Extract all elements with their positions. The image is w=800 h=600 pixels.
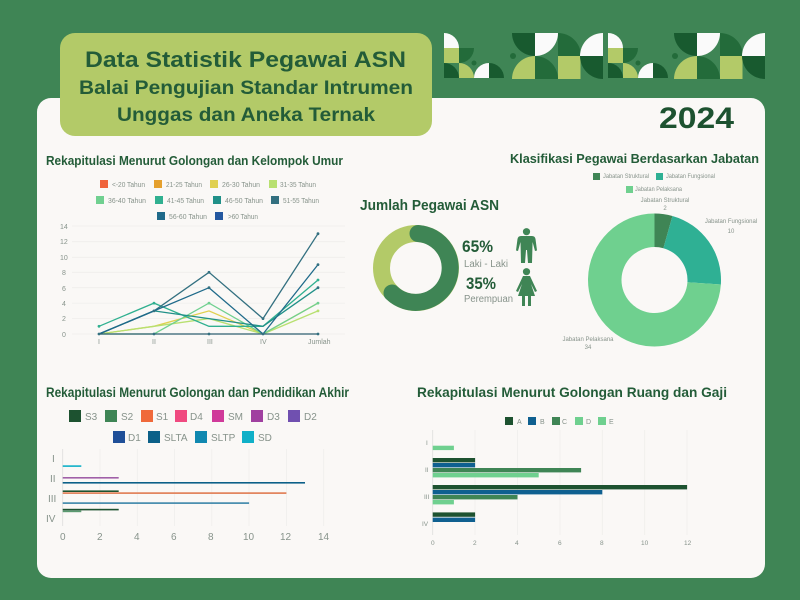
legend: jabatan: Jabatan Struktural — [603, 174, 649, 180]
line chart: age group by rank: I — [98, 339, 100, 346]
legend: pendidikan: D1 — [128, 433, 141, 444]
heading: main title: Data Statistik Pegawai ASN — [85, 47, 406, 72]
legend: pendidikan: S2 — [121, 412, 134, 423]
legend: pendidikan: D2 — [304, 412, 317, 423]
legend: pendidikan: SLTP — [211, 433, 236, 444]
bar chart: pendidikan: IV — [46, 514, 56, 525]
legend: pendidikan — [69, 410, 317, 444]
heading: line chart: Rekapitulasi Menurut Golongan dan Kelompok Umur — [46, 153, 343, 168]
line chart: age group by rank — [60, 224, 345, 346]
legend: age groups: 21-25 Tahun — [166, 182, 202, 189]
legend: pendidikan: S3 — [85, 412, 98, 423]
line chart: age group by rank: II — [152, 339, 156, 346]
heading: pendidikan: Rekapitulasi Menurut Golongan dan Pendidikan Akhir — [46, 385, 350, 400]
bar chart: gaji: 2 — [473, 540, 477, 547]
legend: gaji: A — [517, 419, 522, 426]
bar chart: pendidikan: II — [50, 474, 56, 485]
legend: age groups: 41-45 Tahun — [167, 198, 204, 205]
bar chart: gaji — [422, 430, 692, 547]
bar chart: gaji: 10 — [641, 540, 649, 547]
legend: gaji: E — [609, 419, 614, 426]
donut labels: 34 — [585, 345, 592, 351]
bar chart: pendidikan: III — [48, 494, 56, 505]
legend: age groups: 31-35 Tahun — [280, 182, 316, 189]
legend: pendidikan: S1 — [156, 412, 169, 423]
legend: jabatan: Jabatan Pelaksana — [635, 187, 683, 193]
donut: gender share — [382, 234, 450, 302]
bar chart: pendidikan: 14 — [318, 532, 330, 543]
stat: male: Laki - Laki — [464, 259, 508, 270]
legend: pendidikan: SM — [228, 412, 243, 423]
legend: age groups — [96, 180, 319, 221]
panel: title box — [60, 33, 432, 136]
legend: pendidikan: SLTA — [164, 433, 188, 444]
year: 2024 — [659, 102, 734, 135]
bar chart: gaji: 0 — [431, 540, 435, 547]
legend: gaji: B — [540, 419, 545, 426]
legend: age groups: 51-55 Tahun — [283, 198, 319, 205]
stat: female: 35% — [466, 274, 496, 293]
line chart: age group by rank: 8 — [62, 270, 66, 277]
line chart: age group by rank: IV — [260, 339, 267, 346]
stat: female: Perempuan — [464, 294, 513, 305]
donut labels: 2 — [663, 206, 667, 212]
line chart: age group by rank: 10 — [60, 255, 68, 262]
bar chart: gaji: 4 — [515, 540, 519, 547]
donut: jabatan — [588, 214, 721, 347]
legend: age groups: 46-50 Tahun — [225, 198, 263, 205]
line chart: age group by rank: 12 — [60, 239, 68, 246]
bar chart: gaji: 12 — [684, 540, 692, 547]
legend: jabatan — [593, 173, 715, 193]
line chart: age group by rank: 0 — [62, 332, 66, 339]
icon: female figure — [516, 268, 537, 306]
bar chart: pendidikan: 4 — [134, 532, 140, 543]
bar chart: pendidikan: 6 — [171, 532, 177, 543]
legend: gaji: C — [562, 419, 567, 426]
heading: jumlah pegawai: Jumlah Pegawai ASN — [360, 197, 499, 214]
legend: age groups: <-20 Tahun — [112, 182, 145, 189]
donut labels: Jabatan Pelaksana — [562, 337, 614, 343]
stat: male — [462, 237, 508, 270]
bar chart: pendidikan — [46, 449, 330, 543]
legend: age groups: 56-60 Tahun — [169, 214, 207, 221]
stat: male: 65% — [462, 237, 493, 256]
line chart: age group by rank: 4 — [62, 301, 66, 308]
legend: gaji: D — [586, 419, 591, 426]
legend: age groups: 26-30 Tahun — [222, 182, 260, 189]
legend: pendidikan: D4 — [190, 412, 203, 423]
icon: male figure — [516, 228, 537, 263]
line chart: age group by rank: 6 — [62, 286, 66, 293]
bar chart: gaji: I — [426, 440, 428, 447]
bar chart: pendidikan: 2 — [97, 532, 103, 543]
legend: pendidikan: D3 — [267, 412, 280, 423]
bar chart: gaji: 6 — [558, 540, 562, 547]
bar chart: pendidikan: I — [52, 454, 55, 465]
donut labels: Jabatan Fungsional — [705, 219, 757, 225]
line chart: age group by rank: 2 — [62, 316, 66, 323]
bar chart: pendidikan: 8 — [208, 532, 214, 543]
legend: gaji — [505, 417, 614, 426]
heading: subtitle line 1: Balai Pengujian Standar Intrumen — [79, 78, 413, 99]
line chart: age group by rank: 14 — [60, 224, 68, 231]
donut labels: Jabatan Struktural — [641, 198, 689, 204]
donut labels: 10 — [728, 229, 735, 235]
bar chart: gaji: 8 — [600, 540, 604, 547]
heading: gaji: Rekapitulasi Menurut Golongan Ruang dan Gaji — [417, 384, 727, 400]
bar chart: pendidikan: 0 — [60, 532, 66, 543]
panel: main white card — [37, 98, 765, 578]
heading: klasifikasi: Klasifikasi Pegawai Berdasarkan Jabatan — [510, 151, 759, 166]
bar chart: pendidikan: 12 — [280, 532, 292, 543]
legend: age groups: 36-40 Tahun — [108, 198, 146, 205]
stat: female — [464, 274, 513, 305]
legend: age groups: >60 Tahun — [228, 214, 258, 221]
bar chart: pendidikan: 10 — [243, 532, 255, 543]
bar chart: gaji: III — [424, 494, 430, 501]
bar chart: gaji: IV — [422, 521, 429, 528]
decorative geometric pattern — [444, 33, 765, 79]
bar chart: gaji: II — [425, 467, 429, 474]
legend: pendidikan: SD — [258, 433, 272, 444]
legend: jabatan: Jabatan Fungsional — [666, 174, 715, 180]
donut labels — [562, 198, 757, 351]
line chart: age group by rank: III — [207, 339, 213, 346]
line chart: age group by rank: Jumlah — [308, 339, 331, 346]
heading: subtitle line 2: Unggas dan Aneka Ternak — [117, 105, 375, 126]
